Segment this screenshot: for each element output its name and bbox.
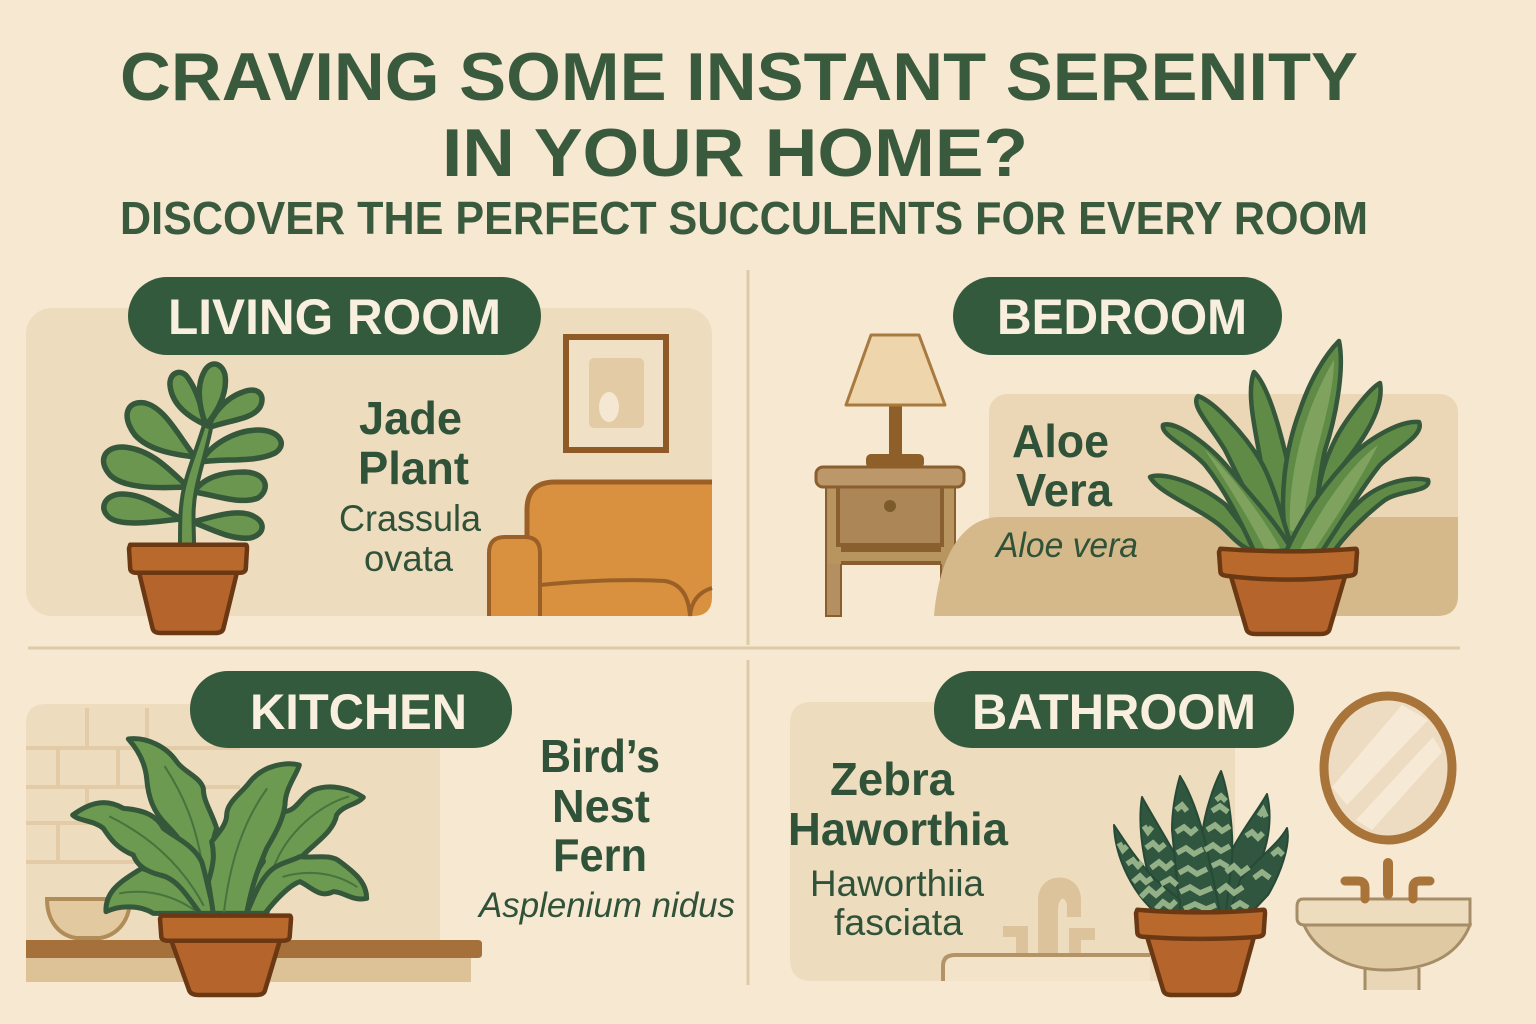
bed — [934, 517, 1458, 616]
icon: background sink — [943, 955, 1150, 981]
label: bird's nest fern: Nest — [552, 780, 650, 832]
heading: bedroom: BEDROOM — [997, 289, 1247, 345]
label: jade plant — [339, 392, 481, 579]
heading: bathroom: BATHROOM — [972, 684, 1256, 740]
title — [120, 39, 1358, 191]
plant: zebra haworthia — [1114, 771, 1288, 995]
pot: aloe — [1219, 549, 1357, 634]
panel: bedroom — [816, 277, 1458, 634]
label: jade plant: ovata — [364, 538, 453, 579]
label: jade plant: Crassula — [339, 498, 481, 539]
heading: bedroom — [953, 277, 1282, 355]
subtitle: DISCOVER THE PERFECT SUCCULENTS FOR EVERY ROOM — [120, 192, 1368, 244]
label: zebra haworthia: Haworthia — [788, 803, 1008, 855]
plant: jade — [104, 364, 281, 633]
heading: kitchen — [190, 671, 512, 748]
icon: sofa — [489, 482, 712, 616]
kitchen tile pattern — [26, 708, 240, 862]
icon: nightstand — [816, 467, 964, 616]
icon: lamp — [846, 335, 945, 468]
title: IN YOUR HOME? — [442, 115, 1028, 191]
living room wall — [26, 308, 712, 616]
label: bird's nest fern: Asplenium nidus — [477, 886, 735, 925]
title: CRAVING SOME INSTANT SERENITY — [120, 39, 1358, 115]
heading: living room — [128, 277, 541, 355]
icon: background faucet — [1003, 878, 1095, 953]
label: zebra haworthia: Zebra — [830, 753, 954, 805]
sink outline — [943, 955, 1150, 981]
icon: mirror — [1324, 696, 1452, 840]
bedroom headboard — [989, 394, 1458, 616]
icon: bowl — [47, 899, 130, 938]
label: jade plant: Jade — [359, 392, 462, 444]
heading: bathroom — [934, 671, 1294, 748]
label: bird's nest fern — [477, 730, 735, 925]
panel: living room — [26, 277, 712, 633]
pot: jade — [129, 545, 247, 633]
label: jade plant: Plant — [358, 442, 469, 494]
icon: picture frame — [566, 337, 666, 450]
plant: aloe — [1150, 341, 1428, 634]
panel: kitchen — [26, 671, 735, 995]
plant: fern — [73, 739, 367, 913]
heading: kitchen: KITCHEN — [250, 684, 467, 740]
label: aloe vera — [994, 415, 1138, 565]
label: bird's nest fern: Bird’s — [540, 730, 660, 782]
kitchen counter — [26, 940, 482, 958]
heading: living room: LIVING ROOM — [168, 289, 501, 345]
label: aloe vera: Aloe — [1012, 415, 1109, 467]
icon: pedestal sink — [1297, 858, 1470, 990]
label: aloe vera: Aloe vera — [994, 526, 1138, 565]
label: zebra haworthia — [788, 753, 1008, 943]
label: aloe vera: Vera — [1016, 464, 1112, 516]
label: zebra haworthia: Haworthiia — [810, 863, 984, 904]
label: zebra haworthia: fasciata — [834, 902, 963, 943]
kitchen lower cabinet — [26, 958, 471, 982]
kitchen wall — [26, 704, 440, 982]
pot: haworthia — [1136, 910, 1265, 995]
label: bird's nest fern: Fern — [553, 829, 647, 881]
panel: bathroom — [788, 671, 1470, 995]
bathroom wall — [790, 702, 1235, 981]
pot: fern — [160, 916, 291, 995]
